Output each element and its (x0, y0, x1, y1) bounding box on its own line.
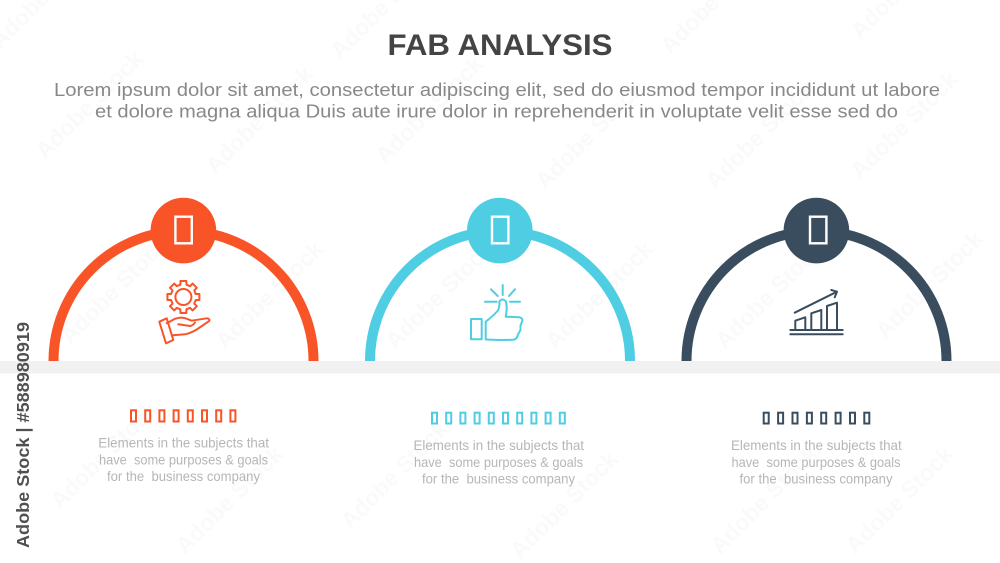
watermark pattern: Adobe Stock (530, 76, 648, 194)
watermark pattern: Adobe Stock (335, 416, 453, 534)
description: benefits (731, 437, 902, 486)
title: FAB ANALYSIS (388, 29, 612, 62)
watermark pattern: Adobe Stock (370, 51, 488, 169)
watermark pattern: Adobe Stock (845, 66, 963, 184)
icon: gear and hand (159, 281, 209, 343)
description: benefits: for the business company (740, 470, 892, 486)
watermark pattern: Adobe Stock (55, 231, 173, 349)
subtitle: et dolore magna aliqua Duis aute irure dolor in reprehenderit in voluptate velit esse sed do (95, 101, 898, 121)
arc: features (54, 231, 314, 361)
watermark pattern: Adobe Stock (700, 76, 818, 194)
watermark pattern: Adobe Stock (200, 61, 318, 179)
heading: features (131, 410, 235, 422)
icon: growth chart (790, 290, 843, 334)
stock credit: Adobe Stock | #588980919 (13, 322, 33, 548)
subtitle (54, 80, 940, 121)
description: advantages: for the business company (422, 470, 575, 486)
description: advantages: Elements in the subjects that (414, 437, 584, 453)
horizontal band (0, 361, 1000, 374)
description: features: for the business company (107, 468, 260, 484)
description: advantages (414, 437, 584, 486)
watermark pattern: Adobe Stock (45, 396, 163, 514)
panel: benefits (686, 198, 946, 487)
watermark pattern: Adobe Stock (710, 236, 828, 354)
badge: advantages (467, 198, 533, 263)
watermark pattern: Adobe Stock (380, 236, 498, 354)
panel: features (54, 198, 314, 484)
watermark pattern: Adobe Stock (540, 236, 658, 354)
watermark pattern: Adobe Stock (170, 441, 288, 559)
arc: benefits (686, 231, 946, 361)
description: advantages: have some purposes & goals (414, 454, 583, 470)
subtitle: Lorem ipsum dolor sit amet, consectetur adipiscing elit, sed do eiusmod tempor incididunt ut labore (54, 80, 940, 100)
description: features (98, 434, 269, 484)
watermark pattern: Adobe Stock (210, 236, 328, 354)
watermark pattern: Adobe Stock (840, 441, 958, 559)
arc: advantages (370, 231, 630, 361)
icon: thumbs up (471, 285, 522, 340)
watermark pattern: Adobe Stock (505, 446, 623, 563)
description: benefits: Elements in the subjects that (731, 437, 902, 453)
panel: advantages (370, 198, 630, 487)
badge: features (151, 198, 216, 263)
heading: advantages (432, 413, 565, 424)
heading: benefits (764, 413, 869, 424)
description: features: have some purposes & goals (99, 451, 268, 467)
badge: benefits (784, 198, 849, 263)
watermark pattern: Adobe Stock (870, 226, 988, 344)
description: benefits: have some purposes & goals (732, 454, 900, 470)
watermark pattern: Adobe Stock (30, 46, 148, 164)
description: features: Elements in the subjects that (98, 434, 269, 450)
watermark pattern: Adobe Stock (705, 441, 823, 559)
